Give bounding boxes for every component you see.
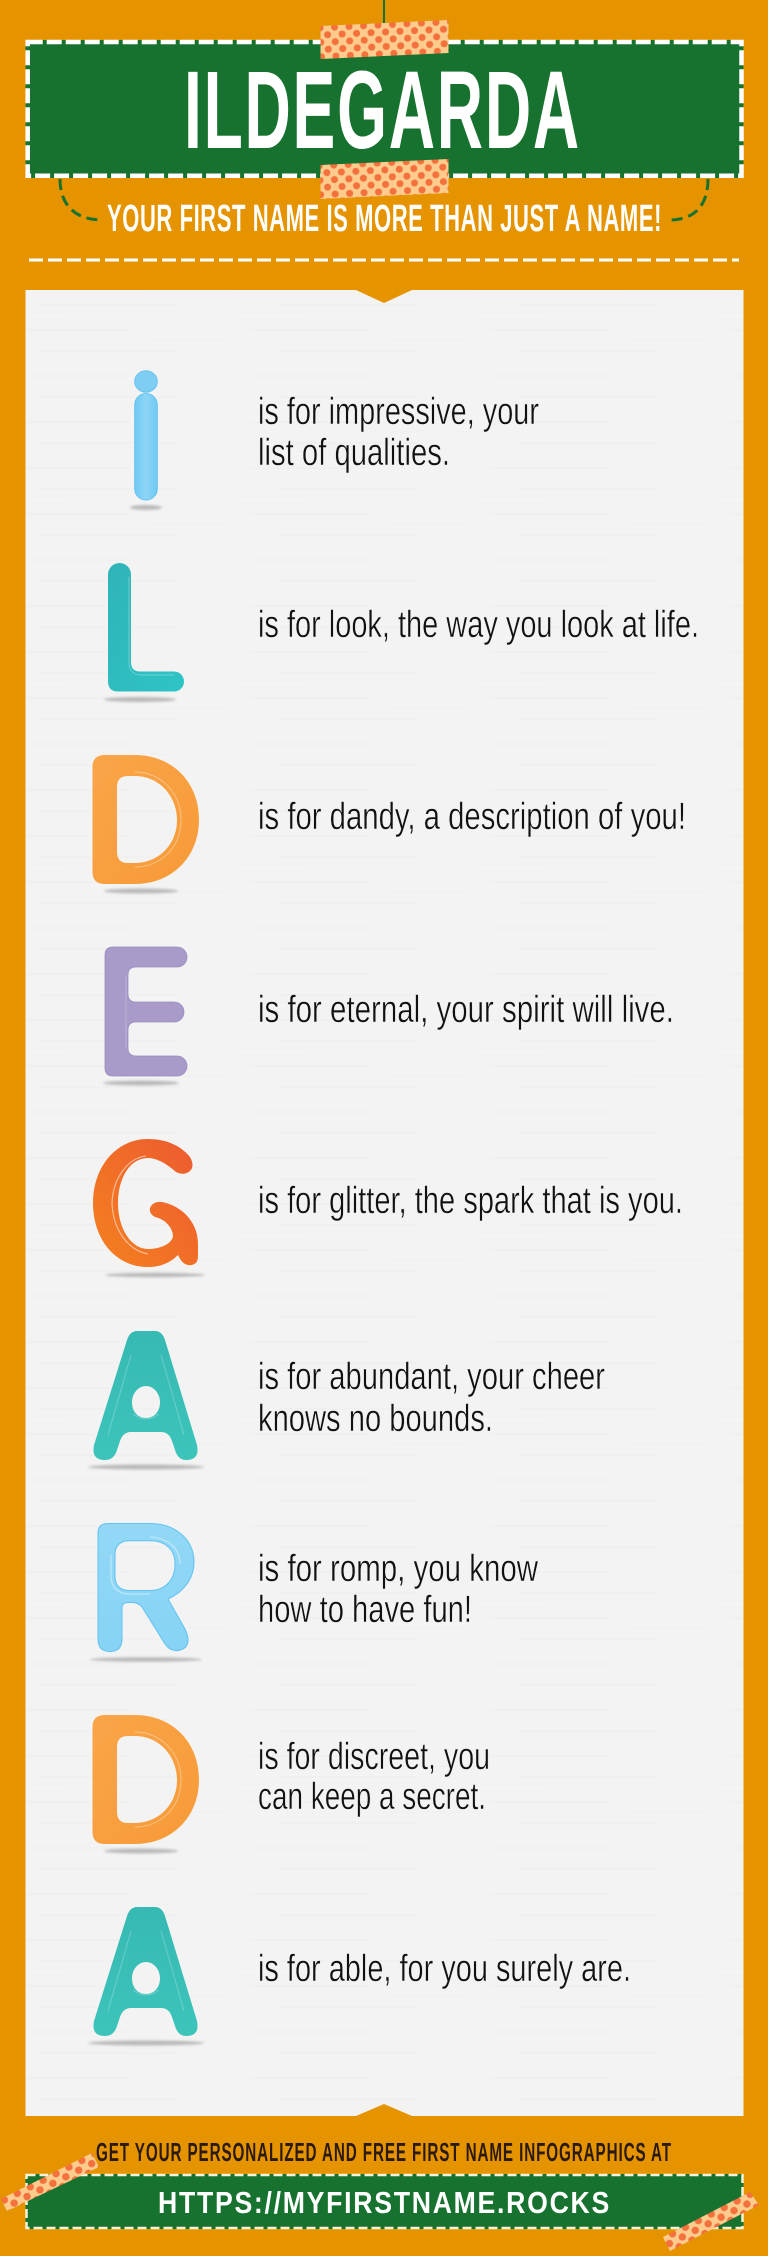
row: G: [93, 1139, 683, 1277]
hanging string: [383, 0, 385, 24]
tape: bottom: [320, 159, 448, 199]
connector: left: [60, 179, 103, 220]
icon: letter A second: [88, 1907, 204, 2046]
text: I: is for impressive, your: [258, 391, 539, 433]
icon: letter E: [103, 947, 187, 1086]
icon: letter D: [92, 755, 199, 894]
text: I: [258, 391, 539, 474]
row: D: [92, 755, 686, 894]
text: A: is for abundant, your cheer: [258, 1356, 605, 1398]
text: A second: is for able, for you surely are.: [258, 1948, 631, 1990]
text: D second: [258, 1736, 490, 1818]
tape: top: [320, 20, 448, 59]
icon: letter R: [90, 1524, 202, 1662]
tape: footer left: [1, 2153, 99, 2211]
row: A: [88, 1331, 605, 1470]
text: A: [258, 1356, 605, 1440]
row: R: [90, 1524, 538, 1662]
row: D second: [92, 1715, 490, 1854]
row: E: [103, 947, 674, 1086]
row: L: [104, 563, 699, 702]
icon: letter G: [93, 1139, 205, 1277]
text: I: list of qualities.: [258, 432, 450, 474]
row: I: [130, 371, 539, 510]
url: HTTPS://MYFIRSTNAME.ROCKS: [158, 2185, 611, 2220]
text: R: is for romp, you know: [258, 1548, 538, 1590]
text: R: [258, 1548, 538, 1631]
icon: letter D second: [92, 1715, 199, 1854]
text: D second: is for discreet, you: [258, 1736, 490, 1778]
connector: right: [669, 179, 708, 220]
text: A: knows no bounds.: [258, 1398, 493, 1440]
tape: footer right: [663, 2192, 759, 2251]
header banner: [26, 40, 744, 178]
icon: letter A: [88, 1331, 204, 1470]
icon: letter I: [130, 371, 162, 510]
text: R: how to have fun!: [258, 1589, 472, 1631]
text: D second: can keep a secret.: [258, 1776, 486, 1818]
footer banner: [26, 2174, 744, 2229]
panel: letters: [26, 290, 744, 2116]
row: A second: [88, 1907, 631, 2046]
icon: letter L: [104, 563, 184, 702]
